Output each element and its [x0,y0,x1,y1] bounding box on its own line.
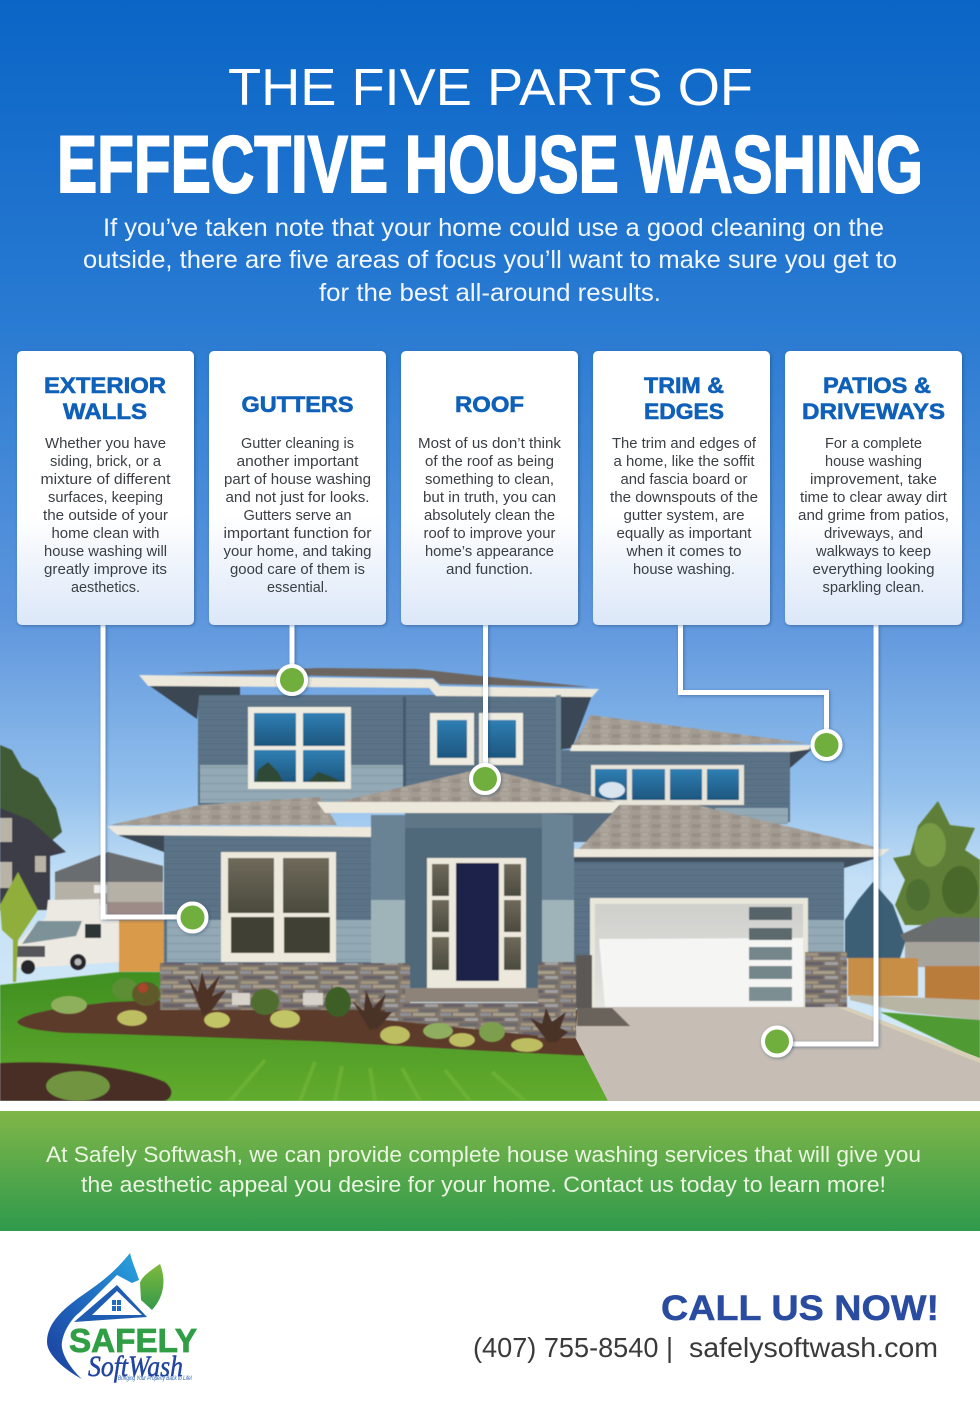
small young tree [0,872,38,982]
call-to-action text: the aesthetic appeal you desire for your home. Contact us today to learn more! [81,1172,886,1197]
text: exterior walls: home clean with [52,526,160,542]
text: patios and driveways: time to clear away dirt [800,490,947,506]
text: gutters: Gutters serve an [244,508,352,524]
panel: roof [401,351,578,625]
stone column [538,962,576,1038]
stone pier right [805,952,847,1007]
text: roof: roof to improve your [424,526,556,542]
text: patios and driveways: and grime from patios, [798,508,949,524]
text: trim and edges: house washing. [633,562,735,578]
text: trim and edges: gutter system, are [624,508,744,524]
text: gutters: part of house washing [224,472,371,488]
marker: trim and edges [812,731,840,759]
left tree [0,745,62,860]
logo wordmark SoftWash: SoftWash [88,1350,183,1383]
grey roof house [55,852,163,912]
panel: trim and edges [593,351,770,625]
driveway shadow [577,1008,630,1026]
patios and driveways connector [790,625,876,1044]
door surround [427,858,526,989]
porch interior [405,813,543,991]
marker: roof [471,765,499,793]
text: patios and driveways: walkways to keep [815,544,931,560]
lower left fascia [107,826,372,837]
text: roof: home’s appearance [425,544,554,560]
upper storey wall [198,695,562,805]
gutters connector [290,625,294,670]
text: trim and edges: equally as important [616,526,752,542]
text: gutters [224,436,372,596]
text: patios and driveways: house washing [825,454,922,470]
text: exterior walls: surfaces, keeping [48,490,163,506]
logo wordmark SAFELY: SAFELY [69,1322,197,1359]
heading: trim and edges [644,373,724,424]
text: patios and driveways: For a complete [825,436,922,452]
text: exterior walls [40,436,170,596]
right tree [893,801,980,925]
porch fascia [317,802,622,813]
logo [47,1253,197,1383]
lower left roof [110,797,337,825]
text: patios and driveways: improvement, take [810,472,937,488]
logo house [74,1285,147,1322]
lower left wall [164,834,374,965]
text: trim and edges: The trim and edges of [612,436,757,452]
text: exterior walls: the outside of your [43,508,168,524]
text: exterior walls: aesthetics. [71,580,140,596]
title line 1: THE FIVE PARTS OF [228,59,753,117]
panel: patios and driveways [785,351,962,625]
rear upper wall [556,750,790,824]
contact: phone and website [473,1332,938,1363]
house [107,668,890,1038]
lower left window [221,852,336,962]
porch right column [542,813,574,962]
porch floor [405,988,541,1002]
text: roof: and function. [446,562,533,578]
text: roof: Most of us don’t think [418,436,562,452]
downspout [556,695,561,785]
text: patios and driveways: sparkling clean. [822,580,924,596]
text: patios and driveways [798,436,949,596]
logo swoosh [47,1253,139,1379]
driveway curb [832,1003,980,1063]
text: gutters: important function for [224,526,372,542]
sky background [0,0,980,1101]
intro paragraph: If you’ve taken note that your home could use a good cleaning on the [103,214,884,242]
text: gutters: good care of them is [230,562,365,578]
lower right fascia [574,849,890,857]
garden plants [46,972,568,1101]
text: gutters: and not just for looks. [226,490,370,506]
text: gutters: essential. [267,580,328,596]
text: exterior walls: house washing will [44,544,167,560]
connector lines [103,625,876,1044]
garage door [590,898,808,1007]
soffit left [150,686,240,719]
text: roof [418,436,562,578]
stone column garage side [576,955,592,1008]
green call-to-action band [0,1111,980,1231]
right neighbour house [900,917,980,967]
marker: gutters [278,666,306,694]
porch roof [333,768,620,803]
trim and edges connector [680,625,826,735]
text: roof: something to clean, [425,472,554,488]
rear roof [572,715,807,748]
rear soffit [790,749,812,768]
heading: gutters: GUTTERS [242,392,354,417]
title [57,59,923,210]
driveway [575,1003,980,1101]
right wooden fence [848,958,980,1002]
front door [456,863,499,981]
heading: patios and driveways: DRIVEWAYS [802,399,945,424]
heading: exterior walls: WALLS [63,399,147,424]
front lawn [0,972,608,1101]
text: gutters: Gutter cleaning is [241,436,354,452]
rear roof fascia [570,745,812,752]
text: trim and edges: and fascia board or [620,472,748,488]
wooden fence [119,920,165,972]
marker: patios and driveways [763,1028,791,1056]
upper centre windows [430,713,523,765]
soffit right [556,695,592,750]
logo tagline: Bringing Your Property Back to Life! [118,1376,192,1382]
heading: patios and driveways [802,373,945,424]
stone base left [160,963,410,1010]
garden mulch bed [17,1000,590,1056]
roof connector [483,625,488,770]
left neighbour house [0,808,66,910]
lower right roof [578,805,878,850]
retaining wall [850,995,980,1020]
lawn mowing stripes [230,1060,525,1101]
top gutter fascia [139,675,599,697]
logo leaf [140,1264,163,1310]
porch soffit [540,813,612,842]
porch left column [371,815,405,963]
garage wall [574,856,844,1006]
text: exterior walls: greatly improve its [44,562,167,578]
text: trim and edges [610,436,758,578]
panel: exterior walls [17,351,194,625]
text: trim and edges: when it comes to [625,544,742,560]
garage side siding [808,920,844,952]
intro paragraph [83,214,897,307]
text: exterior walls: Whether you have [45,436,166,452]
lower left soffit [115,834,164,852]
call-to-action text [46,1142,921,1197]
heading: trim and edges: TRIM & [644,373,724,398]
heading: exterior walls: EXTERIOR [44,373,166,398]
upper left window [248,707,351,789]
text: roof: but in truth, you can [423,490,556,506]
text: patios and driveways: driveways, and [824,526,923,542]
right lawn [880,1012,980,1060]
exterior walls connector [103,625,180,917]
contact: call us now: CALL US NOW! [661,1289,939,1328]
white van [16,899,163,974]
heading: trim and edges: EDGES [644,399,724,424]
text: gutters: your home, and taking [224,544,372,560]
white footer [0,1101,980,1412]
heading: exterior walls [44,373,166,424]
intro paragraph: outside, there are five areas of focus you’ll want to make sure you get to [83,246,897,274]
contact: phone and website: safelysoftwash.com [689,1332,938,1363]
text: trim and edges: a home, like the soffit [614,454,754,470]
text: patios and driveways: everything looking [812,562,934,578]
rear ribbon window [591,765,744,805]
text: exterior walls: siding, brick, or a [50,454,162,470]
text: roof: absolutely clean the [424,508,555,524]
heading: patios and driveways: PATIOS & [823,373,931,398]
text: gutters: another important [236,454,358,470]
foundation vents [232,993,323,1005]
text: exterior walls: mixture of different [40,472,170,488]
call-to-action text: At Safely Softwash, we can provide complete house washing services that will give you [46,1142,921,1167]
blue spruce [845,882,906,958]
marker: exterior walls [178,904,206,932]
porch steps stone [385,1003,575,1036]
panel: gutters [209,351,386,625]
heading: roof: ROOF [455,392,524,417]
intro paragraph: for the best all-around results. [319,279,661,307]
top roof [173,668,590,687]
background neighbourhood [0,745,980,1060]
lower right soffit [574,857,880,868]
lower left mulch bed [0,1062,171,1101]
text: roof: of the roof as being [425,454,554,470]
contact: phone and website: (407) 755-8540 | [473,1332,673,1363]
text: trim and edges: the downspouts of the [610,490,758,506]
